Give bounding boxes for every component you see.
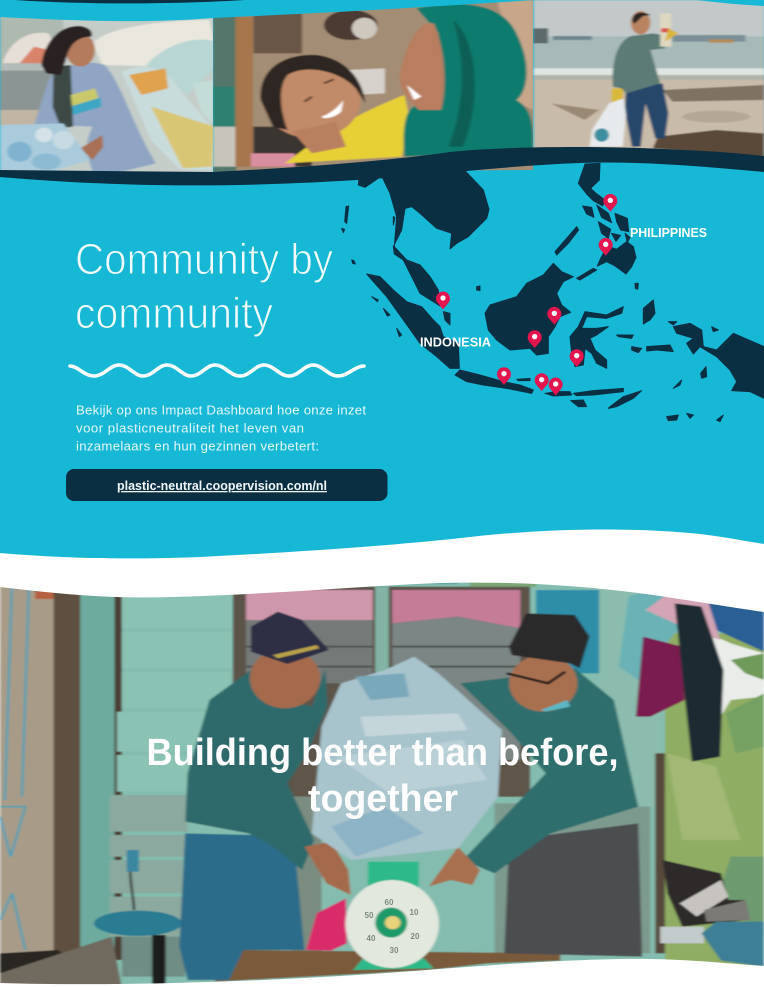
red bag <box>306 898 347 951</box>
photo: woman with sacks of bottles <box>0 13 219 177</box>
pin: Mindanao <box>599 238 613 256</box>
map: Maluku and Papua <box>617 300 764 421</box>
window-side wall <box>598 591 652 807</box>
photo: woman collecting plastic on the beach <box>533 0 764 160</box>
pin: South Kalimantan <box>528 330 542 348</box>
scale dial numbers <box>365 898 420 955</box>
wavy divider <box>70 365 364 376</box>
photo: laughing child and woman in green headscarf <box>213 0 534 173</box>
scale dial numbers: 60 <box>385 898 394 907</box>
label: Philippines: PHILIPPINES <box>630 225 707 240</box>
button: dashboard link <box>66 469 388 501</box>
bottom-left objects <box>0 950 62 974</box>
map: mainland Southeast Asia <box>358 163 489 306</box>
bottom-right objects <box>663 860 748 927</box>
button: dashboard link: plastic-neutral.coopervision.com/nl <box>117 478 327 493</box>
body text: Bekijk op ons Impact Dashboard hoe onze inzet <box>76 402 366 418</box>
clothes and tarp <box>707 604 764 652</box>
plastic bag <box>312 657 502 860</box>
pin: Batam <box>436 292 450 309</box>
pin: Bali <box>549 378 563 395</box>
title: Community by <box>75 235 333 284</box>
pin: East Kalimantan <box>547 307 561 325</box>
scale dial numbers: 50 <box>365 911 374 920</box>
map: Borneo <box>485 263 573 355</box>
label: Indonesia: INDONESIA <box>420 334 492 350</box>
window <box>233 587 530 797</box>
body text: voor plasticneutraliteit het leven van <box>76 420 304 436</box>
dark wave band below photos <box>0 147 764 185</box>
scale dial numbers: 40 <box>367 934 376 943</box>
body text: inzamelaars en hun gezinnen verbetert: <box>76 438 319 454</box>
outdoors foliage <box>665 633 764 967</box>
scale dial numbers: 10 <box>410 908 419 917</box>
left man <box>179 823 304 980</box>
stool <box>94 911 182 936</box>
pin: Luzon <box>603 194 617 212</box>
title: community <box>75 289 273 338</box>
pin: East Java <box>535 373 549 391</box>
map pins <box>436 194 617 395</box>
heading: Building better than before, together: together <box>308 778 458 820</box>
map: Sumatra <box>367 274 459 368</box>
title <box>75 235 333 338</box>
body text <box>76 402 366 454</box>
door <box>0 587 55 954</box>
top dark strip <box>15 0 245 3</box>
pin: South Sulawesi <box>570 349 584 367</box>
weighing scale <box>368 862 419 887</box>
scale dial numbers: 30 <box>390 946 399 955</box>
map: Java and Lesser Sunda Islands <box>455 370 642 408</box>
map: Philippines <box>555 163 636 280</box>
table <box>214 950 560 982</box>
map: scattered small islands <box>342 206 723 422</box>
wall planks <box>115 710 124 792</box>
pin: Central Java <box>497 367 511 385</box>
right man <box>504 823 642 957</box>
photo: two men weighing a bag of plastic bottles <box>0 560 764 987</box>
heading: Building better than before, together <box>146 732 618 820</box>
map: Sulawesi <box>570 307 623 368</box>
heading: Building better than before, together: Building better than before, <box>146 732 618 774</box>
scale dial numbers: 20 <box>411 932 420 941</box>
panel: teal background <box>0 0 764 558</box>
posters <box>238 577 299 587</box>
map: Southeast Asia <box>342 163 764 422</box>
